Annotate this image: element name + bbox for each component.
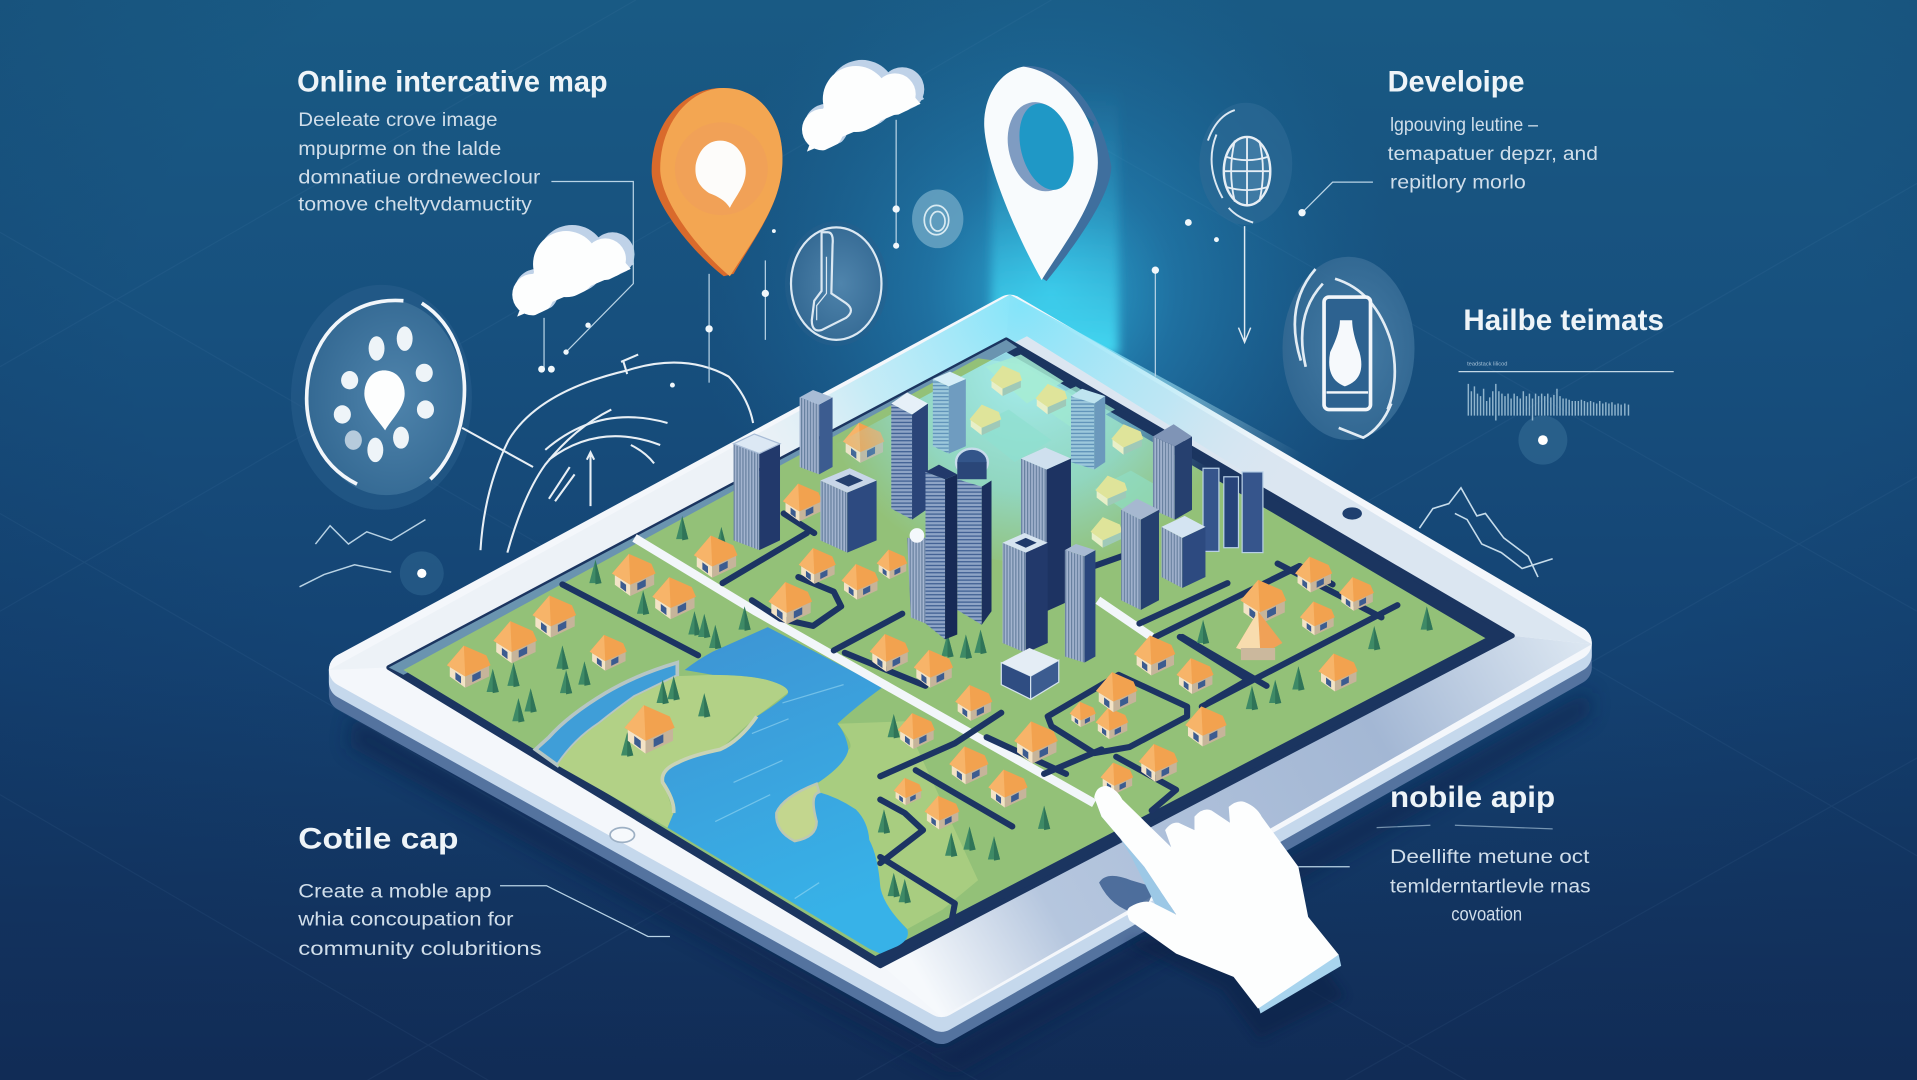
icon circle: phone: [1282, 257, 1415, 440]
text: nobile apip: Deellifte metune oct: [1390, 846, 1590, 868]
text: nobile apip: [1390, 781, 1591, 926]
text: Online interactive map: Online intercative map: [297, 66, 608, 99]
tablet device: [329, 295, 1592, 1027]
text: Online interactive map: domnatiue ordnewecIour: [298, 166, 541, 188]
peninsula: [776, 784, 819, 841]
icon circle: key: [785, 221, 888, 346]
camera: [1342, 507, 1362, 520]
tower: far left: [800, 390, 833, 474]
tower: right: [1121, 499, 1159, 610]
location pin: orange: [652, 88, 782, 276]
island shore: [662, 716, 757, 813]
text: Develoipe: [1388, 66, 1598, 193]
text: Develoipe: lgpouving leutine –: [1390, 114, 1538, 136]
tower: front slim: [1065, 544, 1095, 663]
tower: right low: [1161, 516, 1205, 588]
tower: back right pale: [1071, 389, 1105, 469]
tent-roof house: [1236, 611, 1282, 660]
text: Hailbe teimats with bar chart: Hailbe teimats: [1463, 304, 1664, 337]
tower: tall left: [891, 392, 928, 520]
connector dots: [538, 205, 1306, 388]
trees: [487, 496, 1433, 903]
navy roads: [562, 513, 1397, 923]
hand shadow on background: [1125, 929, 1345, 1039]
text: Cotile cap: Cotile cap: [298, 822, 458, 855]
icon circle: small ring: [912, 189, 963, 248]
text: Hailbe teimats with bar chart: teadstack lilicod: [1467, 362, 1507, 368]
arcs diagram left: [462, 355, 753, 553]
tower: front: [1003, 533, 1048, 653]
tower: left with light roof: [734, 434, 780, 550]
water ripples: [715, 685, 844, 899]
text: Online interactive map: tomove cheltyvdamuctity: [298, 193, 532, 215]
tower: central left half: [925, 465, 957, 639]
line chart right: [1419, 488, 1553, 577]
connector lines and nodes: [500, 120, 1553, 936]
tower: pointed: [1153, 424, 1192, 520]
tower: central right half: [956, 449, 992, 625]
glow over top of map: [685, 352, 1369, 575]
land: [403, 358, 1485, 956]
icon circle: droplets: [291, 285, 472, 510]
white roads: [635, 538, 1152, 803]
screen bezel: [389, 340, 1512, 966]
tower: squat: [820, 468, 877, 553]
bar chart: [1468, 384, 1628, 421]
text: Cotile cap: Create a moble app: [298, 880, 491, 902]
text: Develoipe: temapatuer depzr, and: [1388, 143, 1598, 165]
text: Cotile cap: [297, 822, 542, 960]
icon circle: globe: [1199, 103, 1292, 225]
text: Develoipe: repitlory morlo: [1390, 171, 1526, 193]
text: Cotile cap: community colubritions: [298, 938, 542, 960]
tablet shadow: [348, 691, 1589, 1076]
right shore land: [776, 721, 978, 929]
text: Online interactive map: mpuprme on the lalde: [298, 138, 501, 160]
text: nobile apip: nobile apip: [1390, 781, 1555, 814]
pointing hand: [1094, 786, 1341, 1013]
tower: small round top: [907, 528, 925, 624]
line chart left: [300, 520, 425, 587]
text: Online interactive map: Deeleate crove image: [298, 109, 498, 131]
faded back blocks: [970, 355, 1174, 548]
houses: [447, 423, 1374, 830]
icon: small dot circle left: [400, 551, 444, 595]
cloud: lower: [512, 225, 635, 317]
light beam above tablet: [685, 0, 1418, 611]
island: [557, 675, 789, 828]
map: [403, 352, 1485, 956]
tower: back pale: [933, 372, 966, 454]
river: [535, 663, 677, 765]
text: nobile apip: temlderntartlevle rnas: [1390, 875, 1591, 897]
text: nobile apip: covoation: [1451, 904, 1522, 926]
cloud: upper: [802, 60, 924, 152]
tablet face: [346, 312, 1575, 1000]
home button: [610, 828, 635, 842]
city towers: [734, 372, 1263, 699]
icon: small dot circle right: [1518, 416, 1567, 465]
location pin: white: [984, 66, 1111, 281]
text: Develoipe: Develoipe: [1388, 66, 1525, 99]
low building: [1001, 648, 1059, 699]
text: Cotile cap: whia concoupation for: [297, 908, 514, 930]
tower: central right: [1021, 447, 1071, 611]
water body: [662, 627, 908, 954]
hand shadow on tablet: [1099, 876, 1155, 914]
tower: triple fins: [1203, 468, 1263, 553]
tablet side thickness: [346, 643, 1575, 1027]
text: Online interactive map: [297, 66, 608, 215]
text: Hailbe teimats with bar chart: [1459, 304, 1674, 421]
